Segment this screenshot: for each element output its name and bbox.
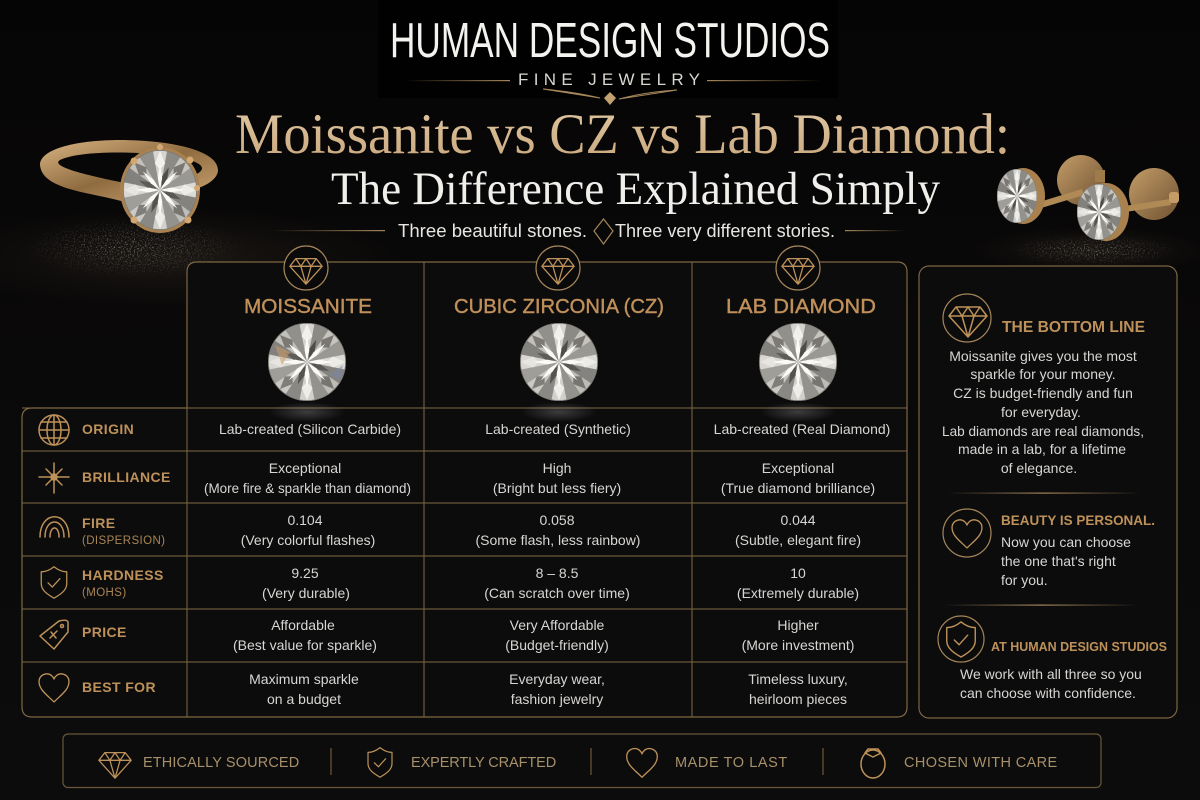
row: fire: (Some flash, less rainbow): [476, 532, 640, 548]
row: brilliance: Exceptional: [269, 460, 341, 476]
row: price: Higher: [777, 617, 819, 633]
row: hardness: (Extremely durable): [737, 585, 859, 601]
badge: ethically sourced: ETHICALLY SOURCED: [143, 755, 300, 771]
row: price: Affordable: [271, 617, 335, 633]
tagline: Three beautiful stones.: [398, 221, 587, 241]
surface speckle right: [1010, 234, 1180, 266]
title: Moissanite vs CZ vs Lab Diamond:: [235, 103, 1010, 166]
surface glow right: [970, 226, 1200, 274]
tagline: [272, 219, 905, 244]
logo backdrop: [378, 0, 838, 98]
badge: made to last: [627, 748, 788, 777]
column: moissanite: [244, 246, 372, 422]
row: brilliance: (True diamond brilliance): [721, 480, 875, 496]
badge: ethically sourced: [99, 753, 300, 778]
the bottom line: THE BOTTOM LINE: [1002, 319, 1145, 336]
row: origin: Lab-created (Silicon Carbide): [219, 421, 401, 437]
badge: expertly crafted: [368, 748, 557, 777]
at human design studios: [938, 616, 1167, 701]
the bottom line: of elegance.: [1001, 460, 1077, 476]
footer badge bar: [63, 734, 1101, 788]
row: brilliance: [39, 460, 875, 496]
row: origin: ORIGIN: [82, 421, 134, 437]
row: fire: 0.044: [780, 512, 816, 528]
row: fire: (Subtle, elegant fire): [735, 532, 861, 548]
column: cubic zirconia: CUBIC ZIRCONIA (CZ): [454, 295, 664, 318]
row: hardness: [41, 565, 859, 601]
badge: made to last: MADE TO LAST: [675, 755, 788, 771]
row: best for: heirloom pieces: [749, 691, 847, 707]
row: brilliance: (More fire & sparkle than diamond): [204, 480, 411, 496]
the bottom line: Moissanite gives you the most: [949, 348, 1137, 364]
row: price: Very Affordable: [510, 617, 605, 633]
row: brilliance: (Bright but less fiery): [493, 480, 621, 496]
row: brilliance: BRILLIANCE: [82, 469, 171, 485]
row: fire: 0.058: [539, 512, 575, 528]
row: hardness: (Very durable): [262, 585, 350, 601]
row: fire: (Very colorful flashes): [241, 532, 375, 548]
row: best for: Maximum sparkle: [249, 671, 359, 687]
beauty is personal: for you.: [1001, 572, 1048, 588]
logo: FINE JEWELRY: [518, 70, 700, 89]
beauty is personal: Now you can choose: [1001, 534, 1131, 550]
image: gold stud earrings: [997, 155, 1179, 241]
surface speckle left: [25, 218, 245, 278]
beauty is personal: BEAUTY IS PERSONAL.: [1001, 512, 1155, 528]
row: fire: 0.104: [287, 512, 323, 528]
the bottom line: CZ is budget-friendly and fun: [953, 385, 1133, 401]
image: gold solitaire ring: [40, 140, 218, 233]
row: best for: [39, 671, 848, 707]
the bottom line: [942, 294, 1145, 476]
logo: [390, 14, 830, 105]
row: best for: BEST FOR: [82, 679, 156, 695]
row: price: (Budget-friendly): [505, 637, 609, 653]
row: best for: Timeless luxury,: [748, 671, 848, 687]
row: brilliance: High: [543, 460, 571, 476]
row: best for: Everyday wear,: [509, 671, 605, 687]
column: cubic zirconia: [454, 246, 664, 422]
row: hardness: (MOHS): [82, 587, 127, 599]
the bottom line: Lab diamonds are real diamonds,: [942, 423, 1144, 439]
column: lab diamond: LAB DIAMOND: [726, 295, 876, 318]
tagline: Three very different stories.: [615, 221, 835, 241]
logo: HUMAN DESIGN STUDIOS: [390, 14, 830, 68]
row: fire: FIRE: [82, 515, 116, 531]
row: hardness: HARDNESS: [82, 567, 164, 583]
row: hardness: 8 – 8.5: [536, 565, 579, 581]
surface glow left: [0, 208, 400, 308]
row: price: PRICE: [82, 624, 127, 640]
row: hardness: 9.25: [291, 565, 319, 581]
at human design studios: can choose with confidence.: [960, 685, 1136, 701]
the bottom line: for everyday.: [1001, 404, 1081, 420]
the bottom line: sparkle for your money.: [970, 366, 1116, 382]
subtitle: The Difference Explained Simply: [331, 163, 940, 215]
column: moissanite: MOISSANITE: [244, 295, 372, 318]
row: best for: on a budget: [267, 691, 341, 707]
row: hardness: 10: [790, 565, 806, 581]
row: hardness: (Can scratch over time): [484, 585, 630, 601]
beauty is personal: [943, 509, 1155, 588]
badge: chosen with care: CHOSEN WITH CARE: [904, 755, 1058, 771]
beauty is personal: the one that's right: [1001, 553, 1116, 569]
at human design studios: We work with all three so you: [960, 666, 1142, 682]
panel: summary sidebar: [919, 266, 1177, 718]
badge: expertly crafted: EXPERTLY CRAFTED: [411, 755, 557, 771]
row: best for: fashion jewelry: [511, 691, 603, 707]
row: fire: (DISPERSION): [82, 535, 165, 547]
row: origin: Lab-created (Real Diamond): [714, 421, 890, 437]
row: fire: [40, 512, 861, 548]
panel: comparison table: [22, 246, 907, 717]
column: lab diamond: [726, 246, 876, 422]
row: price: (Best value for sparkle): [233, 637, 377, 653]
badge: chosen with care: [861, 749, 1058, 778]
row: price: (More investment): [742, 637, 854, 653]
row: origin: Lab-created (Synthetic): [485, 421, 631, 437]
row: origin: [39, 415, 890, 445]
the bottom line: made in a lab, for a lifetime: [958, 441, 1126, 457]
row: price: [40, 617, 854, 653]
row: brilliance: Exceptional: [762, 460, 834, 476]
at human design studios: AT HUMAN DESIGN STUDIOS: [991, 639, 1167, 654]
